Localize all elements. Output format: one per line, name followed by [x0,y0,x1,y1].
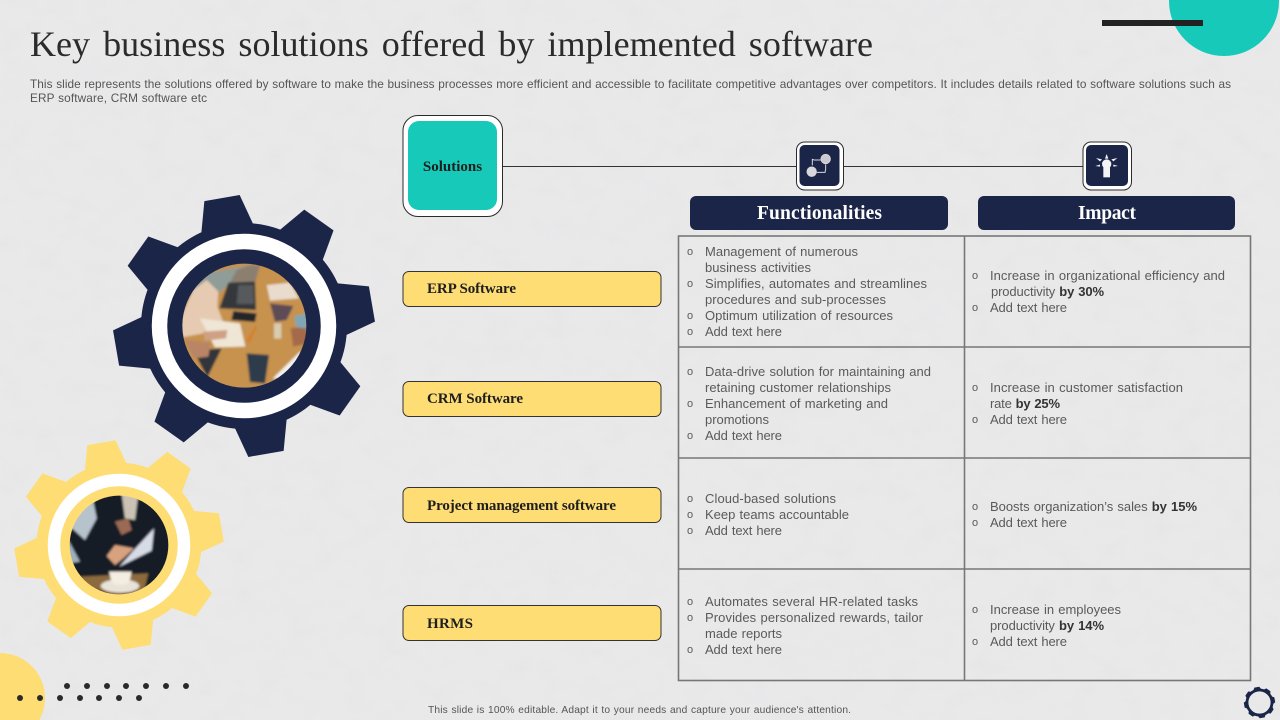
cell: ERP impact: Increase in organizational efficiency and [990,268,1225,283]
table grid [678,236,1250,680]
cell: HRMS functionalities: Provides personalized rewards, tailor [705,610,924,625]
cell: CRM impact: o [972,414,978,426]
cell: ERP functionalities: o [687,310,693,322]
cell: CRM impact: rate by 25% [990,396,1060,411]
cell: ERP functionalities: Optimum utilization of resources [705,308,894,323]
cell: CRM impact: Increase in customer satisfaction [990,380,1183,395]
cell: ERP impact [972,268,1225,315]
decoration: dot pattern [17,683,189,701]
cell: ERP functionalities: o [687,278,693,290]
cell: ERP functionalities: Add text here [705,324,782,339]
cell: ERP impact: Add text here [990,300,1067,315]
cell: ERP impact: o [972,270,978,282]
description text: This slide represents the solutions offered by software to make the business processes more efficient and accessible to facilitate competitive advantages over competitors. It includes details related to software solutions such as [30,77,1231,91]
cell: HRMS functionalities: Automates several HR-related tasks [705,594,918,609]
footer note: This slide is 100% editable. Adapt it to your needs and capture your audience's attention. [428,705,851,716]
header: functionalities [690,196,948,230]
photo: people reviewing documents [70,496,168,594]
large navy gear with photo [112,194,376,458]
row label: ERP Software [403,272,661,306]
cell: ERP impact: productivity by 30% [991,284,1104,299]
cell: project management impact [972,499,1197,530]
description text [30,77,1231,105]
cell: ERP functionalities: Simplifies, automates and streamlines [705,276,928,291]
cell: CRM functionalities: Enhancement of marketing and [705,396,888,411]
cell: project management functionalities: Cloud-based solutions [705,491,836,506]
cell: project management functionalities: o [687,493,693,505]
cell: project management impact: o [972,517,978,529]
cell: project management functionalities: Add text here [705,523,782,538]
decoration: yellow circle bottom left [0,653,45,720]
cell: HRMS functionalities: Add text here [705,642,782,657]
cell: ERP functionalities: Management of numerous [705,244,858,259]
cell: HRMS impact: o [972,604,978,616]
photo: office desk from above [182,264,306,388]
cell: CRM functionalities: promotions [705,412,770,427]
description text: ERP software, CRM software etc [30,91,207,105]
solutions box: Solutions [423,159,482,175]
cell: HRMS impact: Increase in employees [990,602,1122,617]
cell: HRMS impact: productivity by 14% [990,618,1104,633]
cell: ERP functionalities: procedures and sub-processes [705,292,886,307]
cell: ERP functionalities: business activities [705,260,812,275]
cell: HRMS impact: Add text here [990,634,1067,649]
icon: impact [1083,142,1132,190]
header: functionalities: Functionalities [757,203,882,224]
decoration: teal circle top right [1169,0,1279,56]
cell: CRM functionalities: retaining customer relationships [705,380,892,395]
cell: HRMS functionalities: o [687,612,693,624]
header: impact [978,196,1235,230]
cell: CRM functionalities: Add text here [705,428,782,443]
cell: project management functionalities: Keep teams accountable [705,507,849,522]
cell: HRMS impact [972,602,1122,649]
cell: project management functionalities [687,491,849,538]
cell: CRM impact [972,380,1183,427]
row label: Project management software: Project management software [427,498,616,514]
cell: CRM functionalities: Data-drive solution for maintaining and [705,364,931,379]
cell: HRMS impact: o [972,636,978,648]
cell: HRMS functionalities: o [687,644,693,656]
cell: project management impact: o [972,501,978,513]
row label: HRMS [403,606,661,640]
small yellow gear with photo [13,439,225,651]
row label: ERP Software: ERP Software [427,281,516,297]
cell: CRM functionalities [687,364,931,443]
cell: project management impact: Boosts organization’s sales by 15% [990,499,1197,514]
cell: HRMS functionalities: made reports [705,626,782,641]
row label: CRM Software: CRM Software [427,391,523,407]
cell: CRM impact: Add text here [990,412,1067,427]
cell: ERP functionalities: o [687,326,693,338]
solutions box [403,116,502,216]
cell: project management functionalities: o [687,525,693,537]
cell: ERP functionalities: o [687,246,693,258]
cell: CRM functionalities: o [687,398,693,410]
cell: HRMS functionalities [687,594,924,657]
cell: project management functionalities: o [687,509,693,521]
decoration: dark bar top right [1102,20,1203,26]
cell: ERP impact: o [972,302,978,314]
cell: HRMS functionalities: o [687,596,693,608]
cell: CRM functionalities: o [687,366,693,378]
cell: ERP functionalities [687,244,928,339]
row label: HRMS: HRMS [427,616,473,632]
icon: functionalities [796,142,844,190]
header: impact: Impact [1078,203,1136,224]
connector line [503,166,1083,168]
icon: settings gear bottom right [1243,686,1276,719]
title: Key business solutions offered by implemented software [30,24,873,64]
row label: Project management software [403,488,661,522]
row label: CRM Software [403,382,661,416]
cell: project management impact: Add text here [990,515,1067,530]
cell: CRM impact: o [972,382,978,394]
cell: CRM functionalities: o [687,430,693,442]
